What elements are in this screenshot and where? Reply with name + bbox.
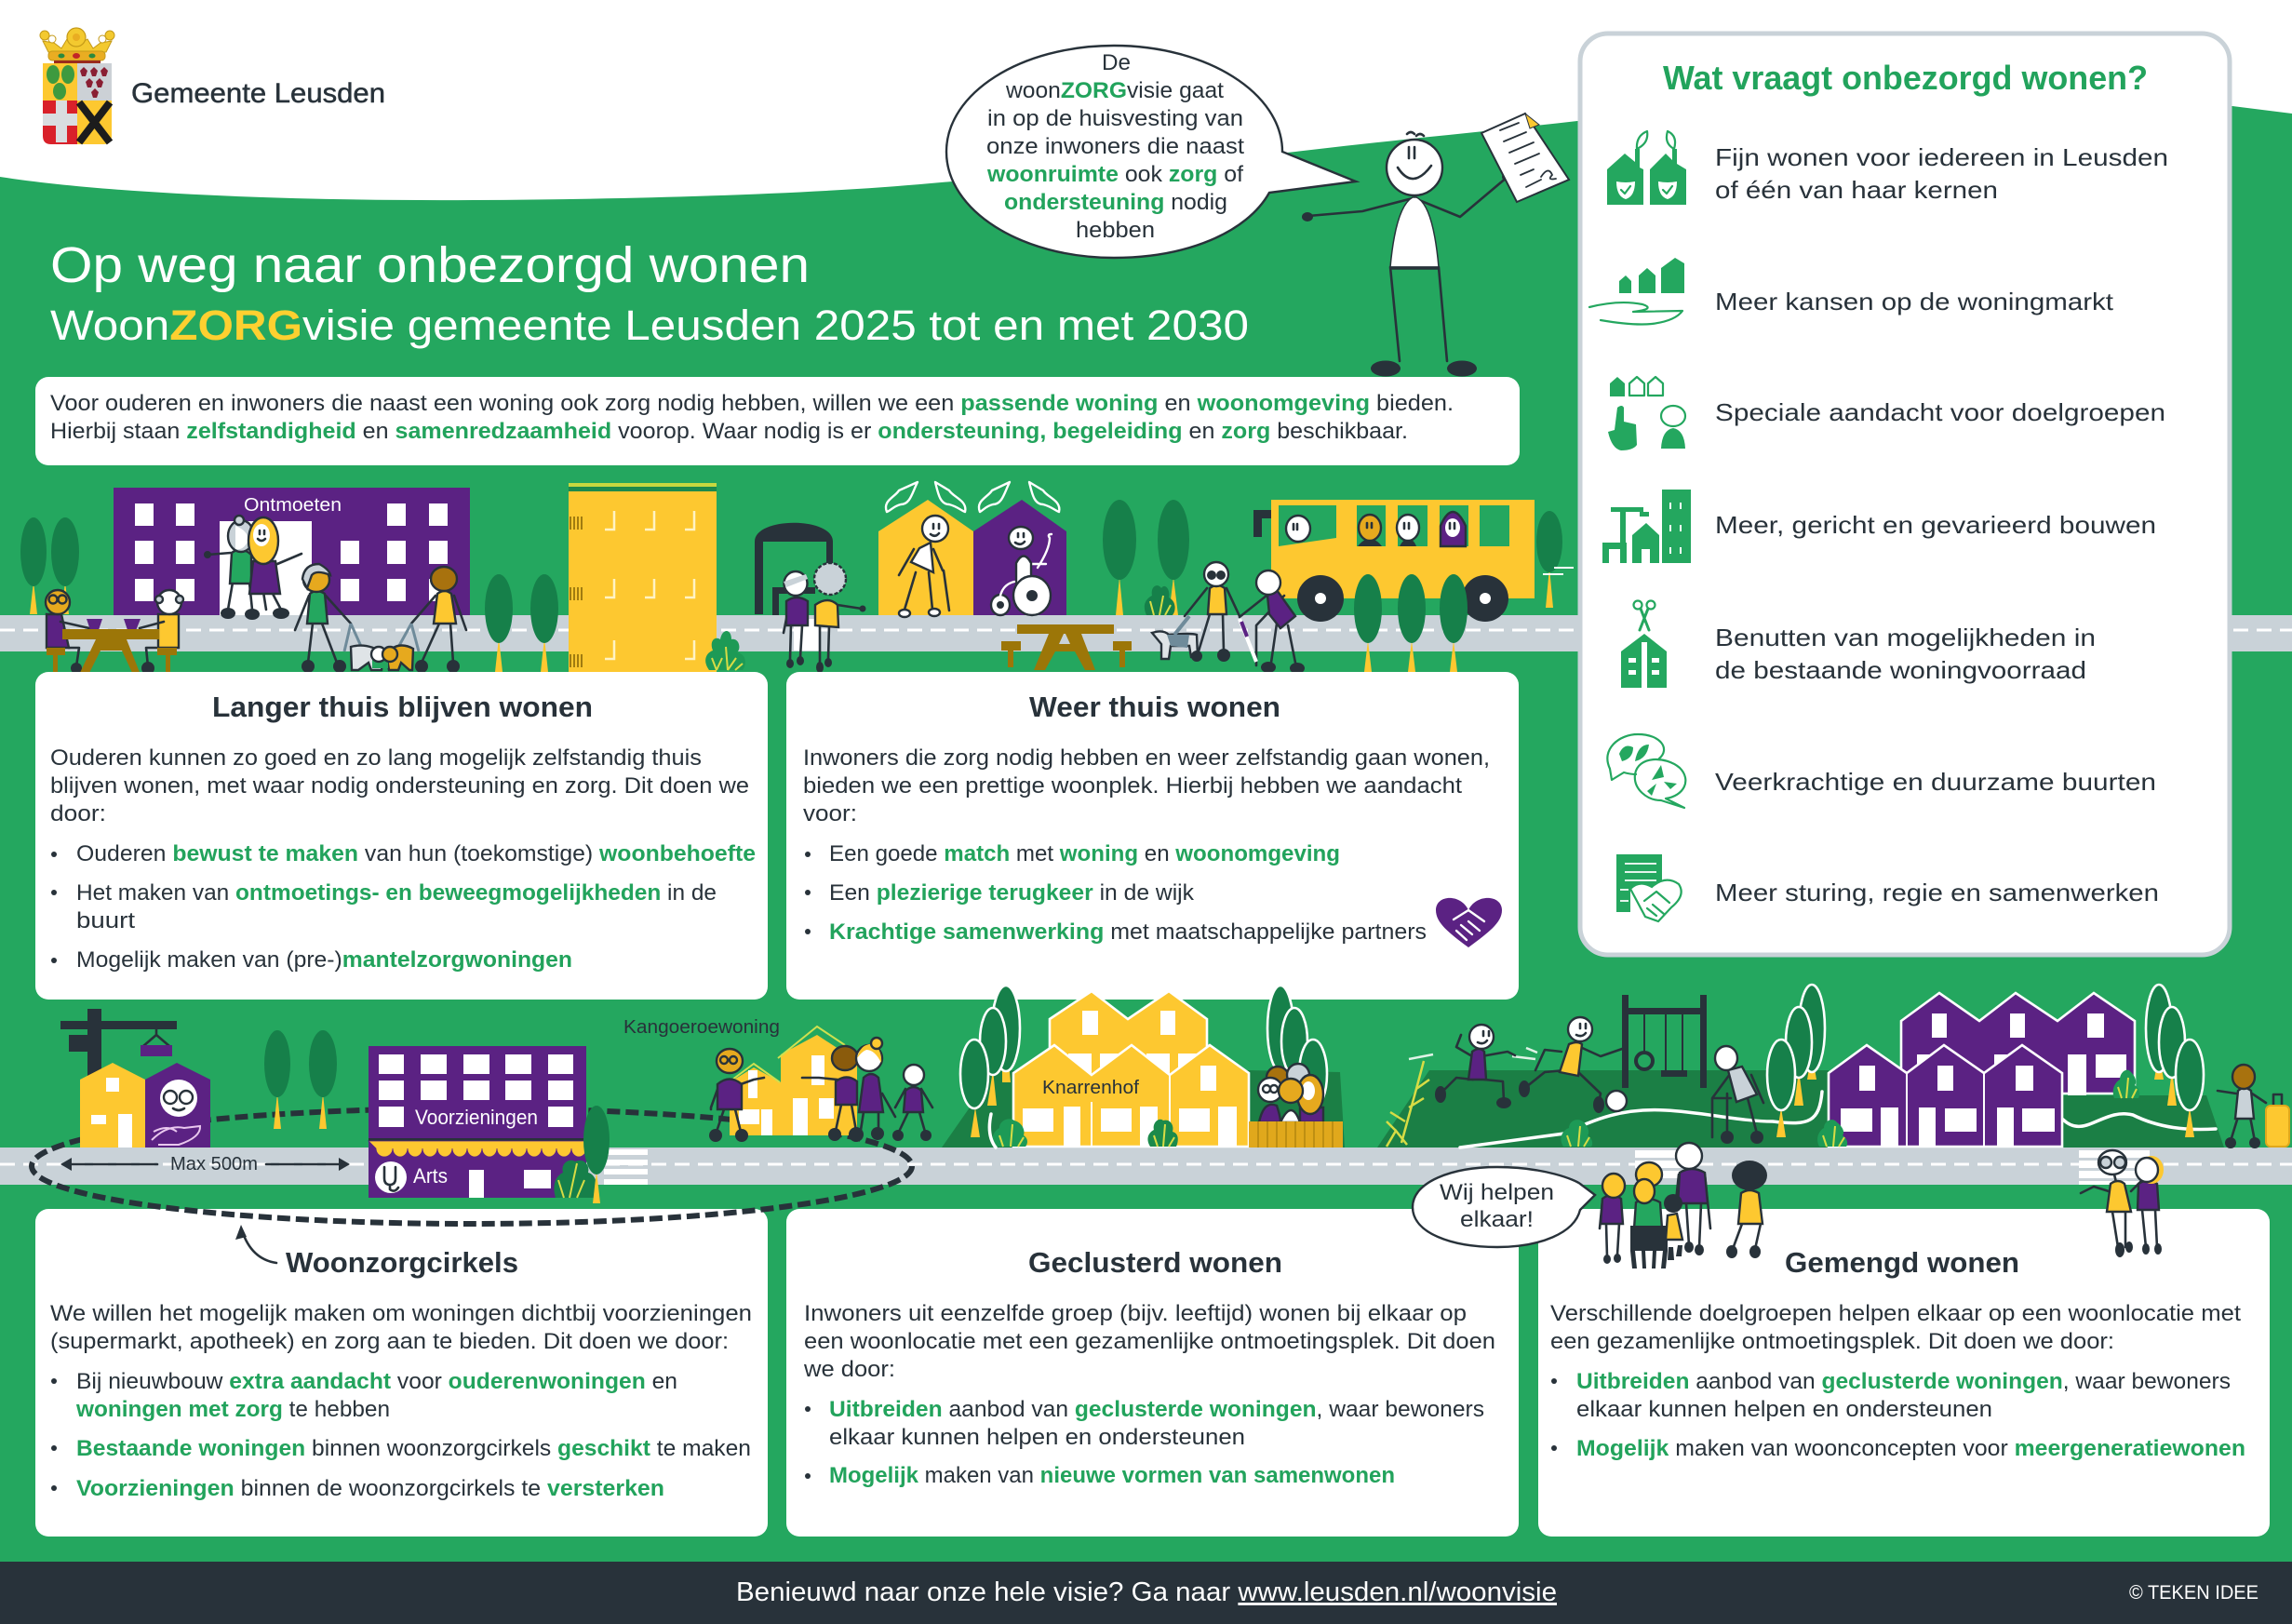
speech bubble: woonzorgvisie: woonruimte ook zorg of (986, 162, 1243, 187)
item 1: fijn wonen: of één van haar kernen (1715, 176, 1998, 204)
item 4: meer bouwen: Meer, gericht en gevarieerd bouwen (1715, 511, 2156, 539)
trees and bush near bus (1103, 500, 1189, 615)
caring hands above houses (886, 482, 1059, 512)
bullet list: elkaar kunnen helpen en ondersteunen (829, 1425, 1245, 1450)
icon: purple heart with handshake (1436, 898, 1502, 947)
fence (1249, 1121, 1343, 1148)
document (1481, 114, 1569, 202)
item 7: meer sturing (1616, 854, 2159, 921)
crane (60, 1009, 177, 1080)
intro text: Voor ouderen en inwoners die naast een woning ook zorg nodig hebben, willen we een passende woning en woonomgeving bieden. (50, 391, 1454, 416)
bushes along Knarrenhof (993, 1119, 1178, 1147)
heading: Gemengd wonen (1785, 1246, 2019, 1279)
building: Voorzieningen and Arts: Voorzieningen (415, 1106, 538, 1129)
body text: Verschillende doelgroepen helpen elkaar op een woonlocatie met (1550, 1301, 2241, 1326)
subtitle: Woon ZORG visie gemeente Leusden 2025 tot en met 2030 (50, 302, 1249, 349)
bus stop shelter (755, 523, 833, 615)
building: Voorzieningen and Arts (369, 1046, 586, 1198)
speech bubble: woonzorgvisie: De (1102, 50, 1131, 75)
group helping each other (1600, 1143, 1767, 1268)
heading: Woonzorgcirkels (286, 1246, 518, 1279)
older person with walker (1712, 1046, 1763, 1144)
bullet list (805, 1397, 1484, 1488)
item 5: benutten: Benutten van mogelijkheden in (1715, 624, 2096, 651)
two people at bus stop (784, 563, 865, 673)
footer link text: Benieuwd naar onze hele visie? Ga naar www.leusden.nl/woonvisie (736, 1577, 1557, 1607)
bullet list: Een goede match met woning en woonomgeving (829, 841, 1340, 866)
trees mid (485, 574, 558, 672)
body text (803, 745, 1490, 826)
bullet list: Ouderen bewust te maken van hun (toekomstige) woonbehoefte (76, 841, 756, 866)
body text: een gezamenlijke ontmoetingsplek. Dit doen we door: (1550, 1329, 2114, 1354)
kangaroo house (729, 1027, 857, 1135)
heading: Geclusterd wonen (1028, 1246, 1282, 1279)
swing (1622, 995, 1707, 1088)
Knarrenhof clustered houses (1013, 991, 1249, 1147)
hill behind Knarrenhof (942, 1070, 1345, 1148)
bullet list: Bestaande woningen binnen woonzorgcirkels geschikt te maken (76, 1436, 751, 1461)
yellow house with person and cane (878, 482, 1059, 617)
body text (1550, 1301, 2241, 1354)
bullet list: Mogelijk maken van woonconcepten voor meergeneratiewonen (1576, 1436, 2245, 1461)
bubble: Wij helpen elkaar: Wij helpen (1440, 1180, 1554, 1205)
body text: Inwoners die zorg nodig hebben en weer zelfstandig gaan wonen, (803, 745, 1490, 771)
heading: Langer thuis blijven wonen (212, 691, 593, 723)
intro text (50, 391, 1454, 444)
awning (369, 1138, 586, 1157)
body text: (supermarkt, apotheek) en zorg aan te bieden. Dit doen we door: (50, 1329, 729, 1354)
people meeting at door (204, 516, 302, 620)
bullet list: woningen met zorg te hebben (75, 1397, 390, 1422)
picnic table with two people (46, 590, 183, 677)
icon: scissors and building (1621, 601, 1667, 688)
zebra crossings right (1635, 1150, 2150, 1185)
bullet list: Uitbreiden aanbod van geclusterde woningen, waar bewoners (1576, 1369, 2231, 1394)
item 6: veerkrachtig: Veerkrachtige en duurzame buurten (1715, 768, 2156, 796)
body text (803, 1301, 1495, 1382)
item 5: benutten: de bestaande woningvoorraad (1715, 656, 2086, 684)
intro text: Hierbij staan zelfstandigheid en samenredzaamheid voorop. Waar nodig is er ondersteuning, begeleiding en zorg beschikbaar. (50, 419, 1408, 444)
body text: blijven wonen, met waar nodig ondersteuning en zorg. Dit doen we (50, 773, 749, 799)
trees around purple houses (1767, 985, 2204, 1137)
family at kangaroo house (709, 1038, 932, 1142)
tree and bush by Voorzieningen (554, 1106, 610, 1203)
person with suitcase (2218, 1065, 2289, 1148)
item 7: meer sturing: Meer sturing, regie en samenwerken (1715, 879, 2159, 906)
item 2: meer kansen: Meer kansen op de woningmarkt (1715, 288, 2114, 315)
icon: speech bubbles with leaves and hands (1607, 734, 1685, 808)
item 6: veerkrachtig (1607, 734, 2156, 808)
bus (1253, 500, 1535, 622)
body text: We willen het mogelijk maken om woningen dichtbij voorzieningen (50, 1301, 752, 1326)
body text (50, 745, 749, 826)
speech bubble: woonzorgvisie (946, 46, 1356, 258)
item 3: speciale aandacht (1608, 377, 2165, 450)
Knarrenhof clustered houses: Knarrenhof (1042, 1078, 1139, 1098)
bullet list: Voorzieningen binnen de woonzorgcirkels te versterken (76, 1476, 664, 1501)
bullet list (1551, 1369, 2245, 1461)
body text: Inwoners uit eenzelfde groep (bijv. leeftijd) wonen bij elkaar op (804, 1301, 1467, 1326)
bullet list (805, 841, 1427, 945)
crown (40, 28, 114, 63)
speech bubble: woonzorgvisie: woonZORGvisie gaat (1005, 78, 1224, 103)
trees in front of bus (1354, 511, 1574, 672)
bullet list: elkaar kunnen helpen en ondersteunen (1576, 1397, 1992, 1422)
distance arrow: Max 500m (60, 1154, 350, 1174)
speech bubble: woonzorgvisie: onze inwoners die naast (986, 134, 1244, 159)
organisation name: Gemeente Leusden (131, 78, 385, 109)
body text: een woonlocatie met een gezamenlijke ontmoetingsplek. Dit doen (804, 1329, 1495, 1354)
title (50, 237, 1249, 349)
people with dogs (295, 564, 466, 673)
bubble: Wij helpen elkaar: elkaar! (1460, 1207, 1534, 1232)
blind person with guide dog and companion (1152, 562, 1305, 674)
stick figure with document (1302, 114, 1569, 376)
purple house with person in wheelchair (973, 500, 1066, 615)
tall grasses (1387, 1048, 1537, 1147)
main title: Op weg naar onbezorgd wonen (50, 237, 810, 293)
icon: houses with leaves and shields (1607, 131, 1686, 205)
body text (50, 1301, 752, 1354)
bullet list: buurt (76, 908, 135, 933)
trees bottom left (264, 1030, 337, 1129)
new-build houses (80, 1063, 210, 1148)
road top (0, 615, 2292, 651)
card: Langer thuis blijven wonen (35, 672, 768, 1000)
building: Voorzieningen and Arts: Arts (413, 1164, 448, 1188)
bubble: Wij helpen elkaar (1413, 1167, 1595, 1247)
icon: stethoscope (375, 1161, 407, 1193)
item 4: meer bouwen (1602, 490, 2156, 563)
picnic table (1001, 624, 1132, 670)
panel heading: Wat vraagt onbezorgd wonen? (1663, 59, 2148, 97)
bullet list (51, 1369, 751, 1501)
body text: we door: (803, 1357, 895, 1382)
group of neighbours behind fence (1258, 1064, 1323, 1122)
card: Gemengd wonen (1538, 1209, 2270, 1537)
panel: Wat vraagt onbezorgd wonen (1580, 34, 2230, 955)
woonzorgcirkel dashed ellipse (32, 1108, 912, 1224)
card: Weer thuis wonen (786, 672, 1519, 1000)
icon: crane and buildings (1602, 490, 1691, 563)
trees left (20, 517, 79, 614)
bullet list: Mogelijk maken van nieuwe vormen van samenwonen (829, 1463, 1395, 1488)
winding white path (989, 1092, 2216, 1148)
bullet list: Bij nieuwbouw extra aandacht voor ouderenwoningen en (76, 1369, 677, 1394)
running people (1435, 1017, 1627, 1113)
label: Kangoeroewoning: Kangoeroewoning (623, 1017, 780, 1038)
arrow to Woonzorgcirkels heading (235, 1225, 276, 1263)
item 1: fijn wonen: Fijn wonen voor iedereen in Leusden (1715, 143, 2168, 171)
icon: document with handshake heart (1616, 854, 1682, 921)
footer bar (0, 1562, 2292, 1624)
street scene top (20, 482, 1574, 678)
bullet list (51, 841, 756, 973)
trees left of Knarrenhof (960, 986, 1020, 1137)
card: Woonzorgcirkels (35, 1209, 768, 1537)
building: Ontmoeten: Ontmoeten (244, 495, 342, 516)
item 1: fijn wonen (1607, 131, 2168, 205)
bush by yellow building (705, 631, 745, 670)
speech bubble: woonzorgvisie: ondersteuning nodig (1004, 190, 1227, 215)
body text: door: (50, 801, 106, 826)
speech bubble: woonzorgvisie: in op de huisvesting van (987, 106, 1243, 131)
bullet list: Een plezierige terugkeer in de wijk (829, 880, 1195, 906)
couple at crossing (2081, 1150, 2164, 1257)
icon: houses, hand and person (1608, 377, 1685, 450)
bullet list: Uitbreiden aanbod van geclusterde woningen , waar bewoners (829, 1397, 1484, 1422)
wheelchair user (1630, 1162, 1668, 1268)
body text: voor: (803, 801, 857, 826)
body text: bieden we een prettige woonplek. Hierbij hebben we aandacht (803, 773, 1462, 799)
trees right of Knarrenhof (1267, 986, 1327, 1108)
item 3: speciale aandacht: Speciale aandacht voor doelgroepen (1715, 398, 2165, 426)
bullet list: Het maken van ontmoetings- en beweegmogelijkheden in de (76, 880, 717, 906)
two dogs (351, 645, 413, 670)
distance arrow: Max 500m: Max 500m (170, 1154, 258, 1174)
copyright: © TEKEN IDEE (2129, 1582, 2258, 1604)
purple clustered houses (1829, 993, 2135, 1148)
bullet list: Mogelijk maken van (pre-) mantelzorgwoningen (76, 947, 572, 973)
bullet list: Krachtige samenwerking met maatschappelijke partners (829, 919, 1427, 945)
intro card (35, 377, 1520, 465)
item 2: meer kansen (1589, 258, 2114, 324)
playground hill (1377, 1070, 2224, 1148)
road bottom (0, 1148, 2292, 1185)
icon: houses on hand (1589, 258, 1684, 324)
speech bubble: woonzorgvisie: hebben (1076, 218, 1155, 243)
yellow apartment building (569, 483, 717, 678)
card: Geclusterd wonen (786, 1209, 1519, 1537)
zebra crossing (604, 1149, 648, 1185)
bushes around playground (1562, 1070, 2139, 1147)
heading: Weer thuis wonen (1029, 691, 1280, 723)
building: Ontmoeten (114, 488, 470, 615)
body text: Ouderen kunnen zo goed en zo lang mogelijk zelfstandig thuis (50, 745, 702, 771)
item 5: benutten (1621, 601, 2096, 688)
logo: coat of arms of Leusden (40, 28, 114, 144)
